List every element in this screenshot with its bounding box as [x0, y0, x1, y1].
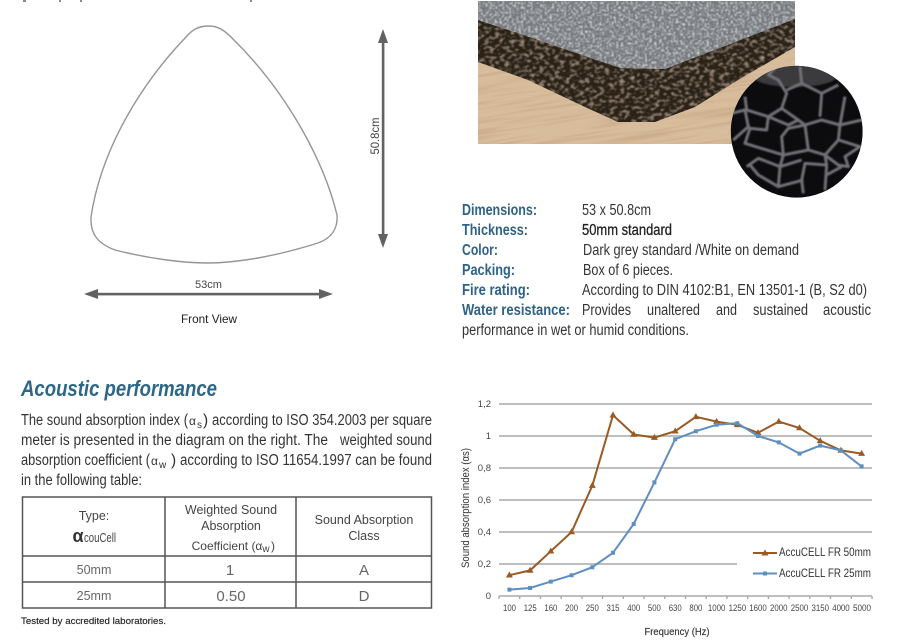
thickness row: Thickness: — [462, 222, 528, 239]
description paragraph: according to ISO 354.2003 per square — [212, 412, 432, 429]
water resistance row: sustained — [753, 302, 808, 319]
absorption table — [22, 497, 432, 608]
color row — [462, 242, 799, 259]
specifications — [462, 202, 871, 339]
absorption line chart — [460, 399, 872, 638]
y axis labels — [478, 399, 491, 602]
dimensions row — [462, 202, 651, 219]
foam cell close-up — [731, 65, 863, 198]
header cells: Type: — [79, 509, 109, 523]
y axis labels: 0,4 — [478, 527, 491, 538]
x axis — [499, 596, 872, 599]
horizontal dimension arrow — [84, 289, 333, 299]
vertical dimension arrow — [378, 29, 388, 248]
front view caption: Front View — [181, 312, 237, 326]
description paragraph: s — [197, 420, 202, 431]
packing row — [462, 262, 673, 279]
y axis labels: 0,6 — [478, 495, 491, 506]
front view diagram — [84, 26, 388, 326]
row: 50mm: A — [359, 562, 369, 579]
description paragraph: weighted sound — [339, 432, 432, 449]
header cells: Class — [348, 529, 380, 543]
color row: Color: — [462, 242, 498, 259]
row: 25mm: 25mm — [77, 589, 111, 603]
description paragraph: ) — [171, 452, 176, 469]
width label: 53cm — [195, 279, 222, 291]
description paragraph: in the following table: — [21, 472, 142, 489]
x axis labels: 125 — [524, 603, 537, 614]
row: 25mm — [77, 588, 370, 605]
x axis labels: 250 — [586, 603, 599, 614]
row: 50mm: 50mm — [77, 563, 111, 577]
dimensions row: 53 x 50.8cm — [582, 202, 651, 219]
header cells: Sound Absorption — [315, 513, 413, 527]
x axis labels: 100 — [503, 603, 516, 614]
water resistance row: Water resistance: — [462, 302, 570, 319]
legend: AccuCELL FR 25mm — [779, 568, 871, 580]
row: 50mm: 1 — [226, 562, 234, 579]
x axis labels: 1600 — [749, 603, 767, 614]
triangular panel outline — [91, 26, 337, 263]
legend — [753, 547, 871, 580]
grey panel top — [478, 1, 795, 69]
x axis labels: 2500 — [791, 603, 808, 614]
row: 25mm: D — [359, 588, 370, 605]
water resistance row: and — [716, 302, 737, 319]
dimensions row: Dimensions: — [462, 202, 537, 219]
header cells: couCell — [84, 530, 116, 545]
series: AccuCELL FR 50mm — [506, 412, 865, 578]
x axis labels: 1250 — [729, 603, 746, 614]
x axis labels: 200 — [565, 603, 578, 614]
cell walls — [732, 67, 862, 193]
packing row: Packing: — [462, 262, 515, 279]
water resistance row: performance in wet or humid conditions. — [462, 322, 689, 339]
height label: 50.8cm — [368, 118, 382, 154]
water resistance row: Provides — [582, 302, 631, 319]
description paragraph: according to ISO 11654.1997 can be found — [180, 452, 432, 469]
thickness row: 50mm standard — [582, 222, 672, 239]
cropped text remnant at top edge — [23, 0, 252, 2]
table grid — [22, 497, 432, 608]
header cells: α — [72, 526, 84, 546]
description paragraph: The sound absorption index ( — [21, 412, 189, 429]
wood surface — [478, 20, 795, 144]
header cells — [72, 503, 413, 555]
y axis labels: 0,8 — [478, 463, 491, 474]
product photo — [478, 1, 795, 144]
header cells: w — [261, 544, 270, 555]
y axis labels: 0 — [486, 591, 491, 602]
color row: Dark grey standard /White on demand — [583, 242, 799, 259]
x axis labels: 800 — [689, 603, 702, 614]
x axis labels: 5000 — [853, 603, 871, 614]
thickness row — [462, 222, 672, 239]
dark panel edge — [478, 18, 795, 122]
legend: AccuCELL FR 50mm — [779, 547, 871, 559]
description paragraph: α — [189, 414, 196, 428]
description paragraph: absorption coefficient ( — [21, 452, 151, 469]
water resistance row — [462, 302, 871, 339]
heading: acoustic performance: Acoustic performance — [20, 376, 217, 401]
row: 50mm — [77, 562, 369, 579]
gridlines — [499, 404, 872, 564]
x axis title: Frequency (Hz) — [644, 627, 710, 638]
header cells: ) — [271, 539, 275, 553]
x axis labels: 315 — [606, 603, 620, 614]
fire rating row — [462, 282, 867, 299]
series: AccuCELL FR 25mm — [507, 421, 864, 592]
header cells: Weighted Sound — [185, 503, 277, 517]
y axis title: Sound absorption index (αs) — [460, 448, 472, 568]
description paragraph: meter is presented in the diagram on the right. The — [21, 432, 328, 449]
x axis labels: 1000 — [708, 603, 725, 614]
row: 25mm: 0.50 — [216, 588, 246, 605]
x axis labels — [503, 603, 871, 614]
x axis labels: 160 — [544, 603, 557, 614]
description paragraph: ) — [203, 412, 208, 429]
header cells: Coefficient (α — [192, 539, 262, 553]
y axis labels: 1,2 — [478, 399, 491, 410]
description paragraph — [21, 412, 432, 489]
header cells: Absorption — [201, 519, 261, 533]
description paragraph: w — [158, 460, 167, 471]
y axis labels: 1 — [486, 431, 491, 442]
x axis labels: 3150 — [812, 603, 829, 614]
x axis labels: 2000 — [770, 603, 788, 614]
table footnote: Tested by accredited laboratories. — [21, 616, 166, 627]
x axis labels: 500 — [648, 603, 661, 614]
description paragraph: α — [151, 454, 158, 468]
y axis labels: 0,2 — [478, 559, 491, 570]
water resistance row: unaltered — [647, 302, 700, 319]
x axis labels: 400 — [627, 603, 640, 614]
upper foam highlight — [753, 65, 837, 87]
packing row: Box of 6 pieces. — [583, 262, 673, 279]
water resistance row: acoustic — [823, 302, 871, 319]
x axis labels: 630 — [669, 603, 682, 614]
x axis labels: 4000 — [832, 603, 850, 614]
fire rating row: Fire rating: — [462, 282, 530, 299]
